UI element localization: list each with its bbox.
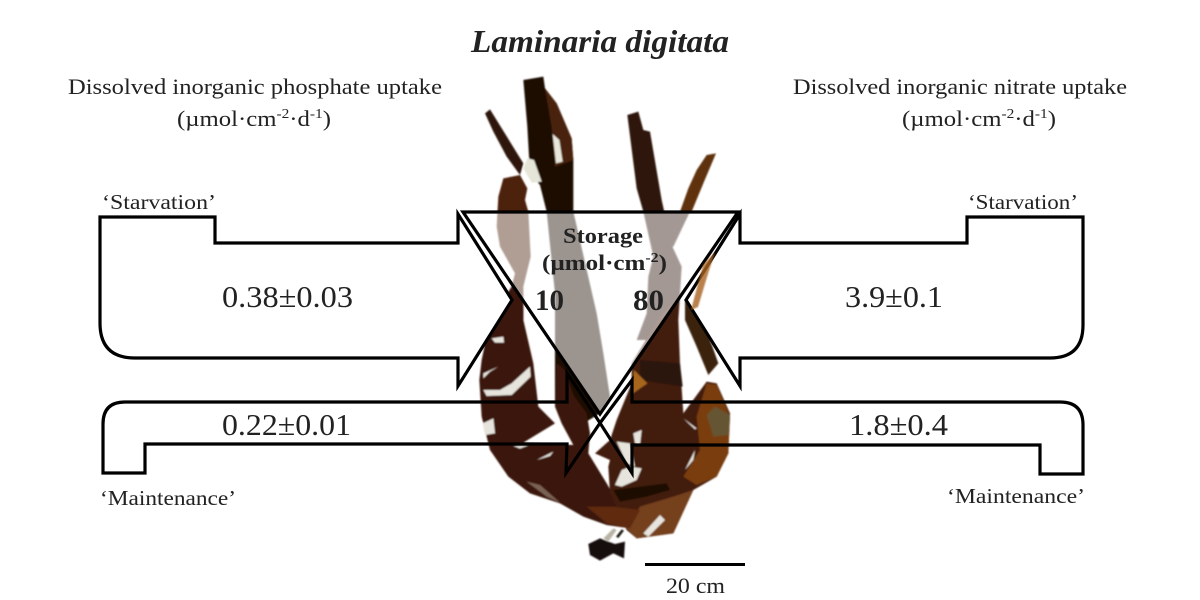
white highlights on fronds [483, 337, 712, 537]
heading: phosphate uptake: -1 [310, 107, 323, 122]
heading: phosphate uptake: ) [323, 106, 331, 131]
heading: nitrate uptake: -2 [1001, 107, 1014, 122]
heading: phosphate uptake: -2 [276, 107, 289, 122]
storage triangle [463, 212, 738, 414]
phosphate storage value: 10 [535, 284, 564, 317]
kelp photograph [479, 77, 730, 561]
heading: phosphate uptake [68, 74, 442, 131]
lower fronds [479, 287, 730, 561]
label: starvation right: ‘Starvation’ [968, 190, 1078, 214]
heading: nitrate uptake: Dissolved inorganic nitrate uptake [793, 74, 1127, 99]
arrow: nitrate maintenance uptake [600, 380, 1083, 474]
nitrate storage value: 80 [633, 284, 664, 317]
heading: phosphate uptake: ·d [289, 106, 310, 131]
storage unit: -2 [645, 251, 659, 266]
heading: nitrate uptake: (µmol·cm [902, 106, 992, 131]
value: nitrate starvation: 3.9±0.1 [845, 279, 943, 314]
storage heading: Storage [563, 223, 643, 248]
storage unit: ) [659, 250, 667, 275]
heading: nitrate uptake: -1 [1035, 107, 1048, 122]
value: phosphate starvation: 0.38±0.03 [222, 279, 353, 314]
upper fronds [483, 77, 716, 423]
arrow: phosphate maintenance uptake [103, 373, 600, 473]
value: phosphate maintenance: 0.22±0.01 [222, 407, 351, 442]
heading: phosphate uptake: Dissolved inorganic phosphate uptake [68, 74, 442, 99]
scale bar: 20 cm [666, 573, 725, 598]
scale bar [645, 563, 745, 598]
kelp sliver over nitrate arrow [691, 252, 715, 310]
label: maintenance right: ‘Maintenance’ [947, 484, 1085, 508]
title: Laminaria digitata [470, 23, 729, 59]
heading: phosphate uptake: (µmol·cm [177, 106, 267, 131]
label: starvation left: ‘Starvation’ [102, 190, 216, 214]
heading: nitrate uptake: ·d [1014, 106, 1035, 131]
heading: nitrate uptake: ) [1048, 106, 1056, 131]
label: maintenance left: ‘Maintenance’ [100, 486, 236, 510]
holdfast [588, 528, 625, 561]
value: nitrate maintenance: 1.8±0.4 [849, 407, 949, 442]
arrow: phosphate starvation uptake [100, 214, 512, 386]
arrow: nitrate starvation uptake [686, 214, 1083, 386]
storage unit: (µmol·cm [542, 250, 633, 275]
heading: nitrate uptake [793, 74, 1127, 131]
